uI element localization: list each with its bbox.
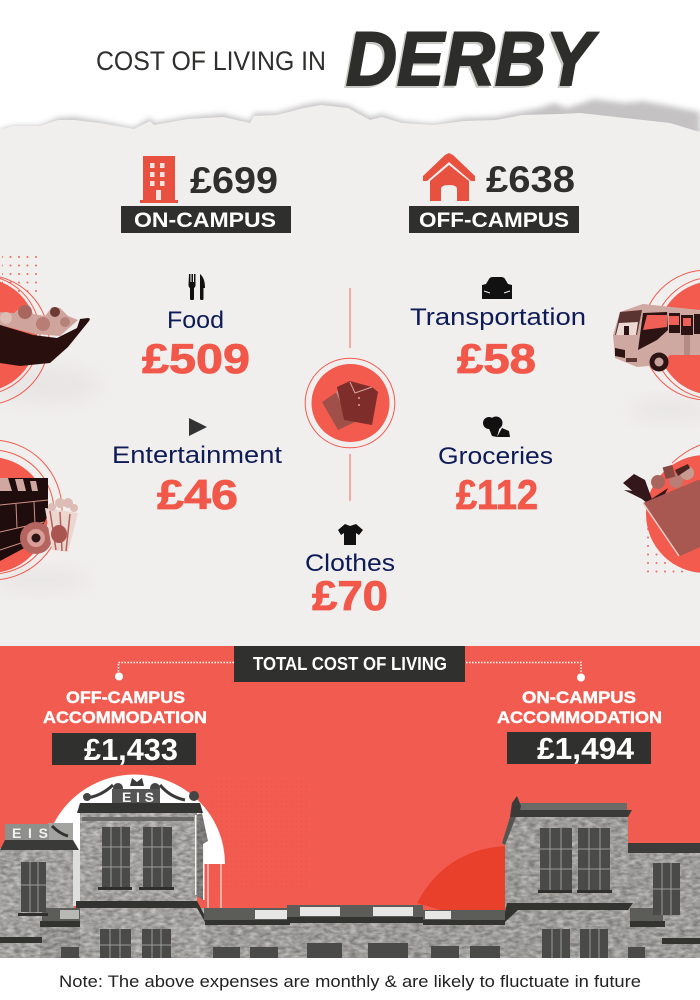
off-campus price: £638 xyxy=(486,159,575,200)
footnote: Note: The above expenses are monthly & are likely to fluctuate in future xyxy=(59,972,641,991)
on-campus accommodation total xyxy=(497,688,662,766)
on-campus summary xyxy=(121,156,291,233)
heading: total cost of living xyxy=(234,646,465,682)
right tower roof xyxy=(502,796,700,853)
off-campus accommodation total: ACCOMMODATION xyxy=(43,708,207,727)
balustrades xyxy=(42,905,663,921)
panel: total cost of living xyxy=(0,646,700,958)
title: DERBY xyxy=(346,17,599,102)
value: £70 xyxy=(312,572,388,619)
value: £46 xyxy=(157,471,238,518)
icon: house xyxy=(423,153,475,201)
small tower sign: EIS xyxy=(12,825,48,841)
icon: building xyxy=(140,156,178,203)
off-campus accommodation total: £1,433 xyxy=(84,732,178,767)
illustration: bus xyxy=(613,270,700,422)
main tower cornice and ornament xyxy=(77,778,203,821)
title: DERBY xyxy=(344,19,597,104)
label: Entertainment xyxy=(112,442,282,469)
connector left xyxy=(115,662,234,680)
item: food xyxy=(142,274,250,382)
value: £58 xyxy=(457,335,536,382)
icon: cutlery xyxy=(188,274,205,300)
icon: t-shirt xyxy=(338,524,363,545)
small tower sign xyxy=(0,823,79,850)
torn paper background xyxy=(0,99,700,646)
item: transportation xyxy=(410,277,586,382)
centre divider lines xyxy=(349,288,351,501)
item: entertainment xyxy=(112,418,282,518)
icon: broccoli xyxy=(483,416,510,437)
connector right xyxy=(466,662,585,682)
off-campus summary xyxy=(409,153,579,233)
on-campus accommodation total: ACCOMMODATION xyxy=(497,708,662,727)
window mullions xyxy=(21,827,680,958)
building photo xyxy=(0,778,700,958)
heading: total cost of living: TOTAL COST OF LIVING xyxy=(253,654,447,674)
title xyxy=(96,17,599,104)
item: clothes xyxy=(305,524,395,619)
icon: car xyxy=(482,277,512,299)
illustration: centre shirts xyxy=(305,358,395,448)
window sills xyxy=(18,887,612,916)
on-campus accommodation total: ON-CAMPUS xyxy=(522,688,636,707)
icon: play xyxy=(189,418,207,436)
main tower cornice and ornament: EIS xyxy=(122,789,154,805)
value: £509 xyxy=(142,335,250,382)
illustration: film clapper and popcorn xyxy=(0,440,90,592)
dot pattern bottom right xyxy=(646,528,690,574)
windows xyxy=(21,827,680,958)
on-campus label: ON-CAMPUS xyxy=(134,209,276,232)
title: COST OF LIVING IN xyxy=(96,46,326,76)
on-campus price: £699 xyxy=(190,160,278,201)
label: Clothes xyxy=(305,550,395,577)
illustration: grocery bag xyxy=(623,445,700,573)
label: Food xyxy=(167,307,224,334)
off-campus accommodation total xyxy=(43,688,207,767)
item: groceries xyxy=(438,416,553,518)
label: Transportation xyxy=(410,304,586,331)
on-campus label xyxy=(121,206,291,233)
illustration: food bowl xyxy=(0,275,100,405)
orange quarter circle xyxy=(417,846,505,910)
dot pattern top left xyxy=(2,252,40,297)
on-campus accommodation total: £1,494 xyxy=(537,731,635,766)
value: £112 xyxy=(456,471,538,518)
string courses xyxy=(0,901,700,944)
off-campus accommodation total: OFF-CAMPUS xyxy=(66,688,185,707)
off-campus label: OFF-CAMPUS xyxy=(419,209,569,232)
label: Groceries xyxy=(438,443,553,470)
white half circle behind tower xyxy=(44,775,225,908)
